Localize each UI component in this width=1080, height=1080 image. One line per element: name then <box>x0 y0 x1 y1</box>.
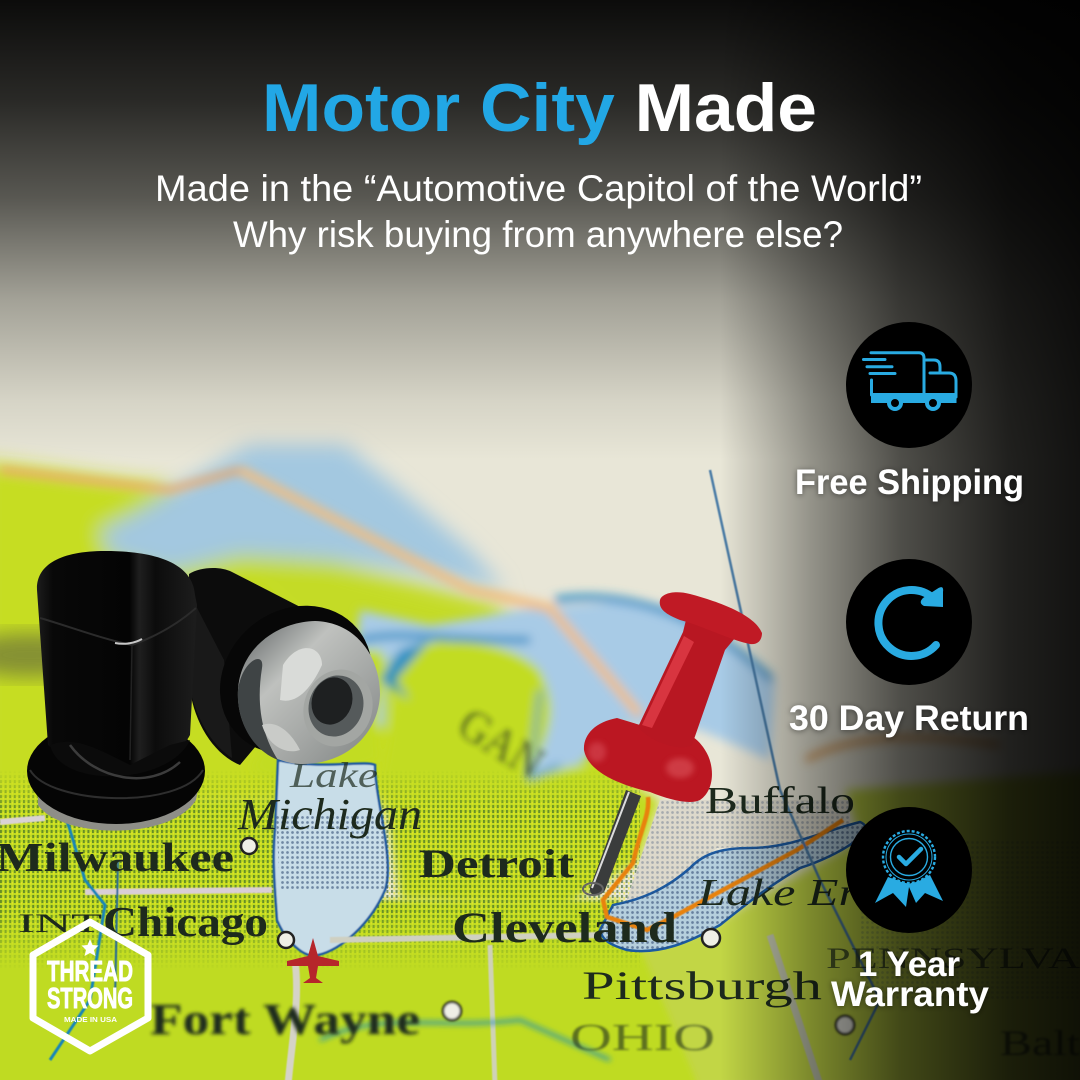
label: 30 day return: 30 Day Return <box>789 699 1029 738</box>
map labels: Chicago <box>103 900 268 946</box>
land masses <box>0 445 640 820</box>
icon: delivery truck <box>864 353 956 409</box>
map labels: Fort Wayne <box>150 995 420 1044</box>
map labels: INT <box>18 909 102 938</box>
pin shaft <box>638 612 740 747</box>
front nut <box>27 551 205 831</box>
map labels: PENNSYLVA <box>826 942 1080 975</box>
Lake Michigan south <box>274 760 388 956</box>
map labels: Michigan <box>237 790 422 839</box>
pin needle <box>590 790 641 895</box>
pin base <box>584 718 712 802</box>
Lake Erie <box>600 822 865 951</box>
map labels: Lake <box>289 755 378 795</box>
map labels: Balt <box>1000 1023 1080 1063</box>
back nut <box>189 568 402 785</box>
label: 1 year warranty: Warranty <box>831 975 990 1014</box>
map pushpin <box>583 592 762 895</box>
city dots <box>241 838 854 1034</box>
product: lug nuts <box>27 551 402 831</box>
subtitle: Made in the “Automotive Capitol of the World” <box>155 168 922 209</box>
logo: thread strong: STRONG <box>47 983 133 1015</box>
subtitle <box>155 168 922 255</box>
pin head <box>660 592 762 644</box>
airport symbol <box>287 938 339 983</box>
map labels <box>0 697 1080 1063</box>
eastern land <box>600 770 1080 1080</box>
map labels: Milwaukee <box>0 834 234 880</box>
map labels: OHIO <box>570 1017 715 1059</box>
map labels: Lake Er <box>697 872 858 914</box>
icon: return arrow <box>878 587 943 656</box>
subtitle: Why risk buying from anywhere else? <box>233 214 843 255</box>
label: free shipping: Free Shipping <box>795 463 1024 502</box>
map roads <box>0 470 880 1080</box>
feature: 30 day return <box>789 559 1029 738</box>
map labels: Detroit <box>419 841 575 886</box>
title: Motor City Made <box>262 70 817 146</box>
feature: 1 year warranty <box>831 807 990 1014</box>
logo: thread strong: MADE IN USA <box>64 1017 117 1024</box>
map labels: Pittsburgh <box>582 963 822 1008</box>
map labels: GAN <box>450 697 553 788</box>
logo: thread strong <box>33 922 148 1051</box>
icon: award ribbon <box>875 831 943 907</box>
logo: thread strong: THREAD <box>47 956 133 988</box>
map labels: Cleveland <box>452 905 677 952</box>
label: 1 year warranty: 1 Year <box>858 945 960 984</box>
map labels: Buffalo <box>705 780 855 822</box>
label: 1 year warranty <box>831 945 990 1014</box>
feature: free shipping <box>795 322 1024 502</box>
halftone fields <box>0 770 640 970</box>
